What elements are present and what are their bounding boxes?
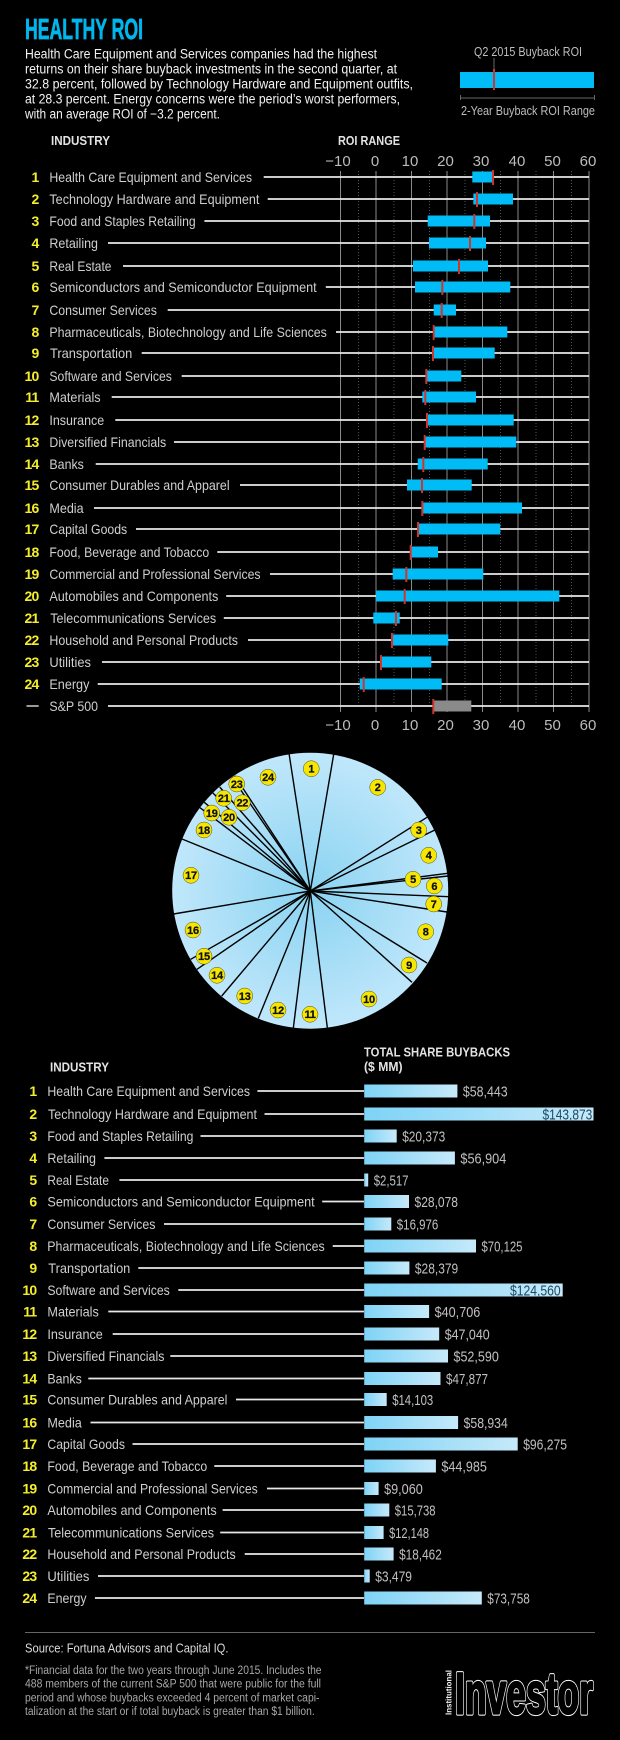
row 24: Energy (47, 1590, 87, 1606)
row 12 (25, 412, 589, 428)
slice number badges: 24 (262, 772, 275, 784)
row 21: 21 (25, 610, 40, 626)
row 3 (32, 213, 589, 229)
row 15: Consumer Durables and Apparel (47, 1392, 227, 1408)
axis grid (340, 171, 589, 712)
row 19: Commercial and Professional Services (49, 566, 261, 582)
bottom axis labels: 60 (580, 717, 596, 734)
row 23: Utilities (47, 1568, 89, 1584)
footnote: *Financial data for the two years through June 2015. Includes the (25, 1665, 322, 1677)
slice number badges: 6 (431, 881, 437, 893)
row 21 (22, 1524, 429, 1542)
slice number badges: 9 (406, 960, 412, 972)
row 16 (25, 500, 589, 516)
row 2 (29, 1106, 593, 1124)
logo: Institutional Investor: Institutional (444, 1670, 454, 1715)
row 16 (22, 1414, 508, 1432)
slice number badges: 22 (236, 798, 248, 810)
row 20: Automobiles and Components (49, 588, 218, 604)
row 2: Technology Hardware and Equipment (48, 1106, 257, 1122)
slice number badges: 15 (198, 951, 210, 963)
slice number badges: 1 (308, 764, 314, 776)
row 3: 3 (32, 213, 40, 229)
row 3: $20,373 (402, 1128, 445, 1146)
row 11: 11 (25, 389, 40, 405)
bottom axis labels: 20 (437, 717, 454, 734)
bottom axis labels (325, 717, 596, 734)
row 13 (22, 1348, 499, 1366)
row 5: Real Estate (47, 1172, 109, 1188)
row 20: Automobiles and Components (47, 1502, 217, 1518)
row 20: 20 (22, 1502, 37, 1518)
slice number badges: 18 (198, 825, 210, 837)
row 13: Diversified Financials (49, 434, 166, 450)
row 17: 17 (25, 521, 40, 537)
row 17: Capital Goods (49, 521, 127, 537)
row 7: 7 (32, 302, 40, 318)
row 12: $47,040 (445, 1326, 490, 1344)
top axis labels: −10 (325, 153, 351, 170)
bottom axis labels: 10 (402, 717, 418, 734)
row 6 (32, 279, 589, 295)
row 24: Energy (49, 676, 89, 692)
row 2: 2 (29, 1106, 37, 1122)
slice number badges: 16 (187, 925, 199, 937)
footnote (25, 1665, 322, 1718)
bottom axis labels: 30 (473, 717, 489, 734)
row 2: $143,873 (542, 1106, 592, 1124)
footnote: period and whose buybacks exceeded 4 percent of market capi- (25, 1693, 320, 1705)
row 18: Food, Beverage and Tobacco (49, 544, 209, 560)
row 18: 18 (22, 1458, 37, 1474)
row 15: $14,103 (392, 1392, 433, 1409)
row 11: Materials (47, 1304, 99, 1320)
row 19: Commercial and Professional Services (47, 1480, 258, 1496)
top axis labels: 10 (402, 153, 418, 170)
slice number badges: 13 (239, 991, 251, 1003)
row 6: 6 (32, 279, 40, 295)
row 17: $96,275 (523, 1436, 567, 1454)
row 11: Materials (49, 389, 101, 405)
row 4 (29, 1150, 506, 1168)
row 21 (25, 610, 589, 626)
column heading: industry: INDUSTRY (51, 134, 111, 148)
slice number badges: 2 (375, 782, 381, 794)
row 24 (25, 676, 589, 692)
row 11 (23, 1304, 480, 1321)
row 12: 12 (22, 1326, 37, 1342)
row 8: Pharmaceuticals, Biotechnology and Life Sciences (47, 1238, 325, 1254)
slice number badges (183, 761, 442, 1022)
row 22: 22 (25, 632, 40, 648)
row 4: Retailing (49, 235, 98, 251)
row 16: Media (49, 500, 84, 516)
legend: 2-Year Buyback ROI Range (461, 103, 595, 118)
bottom axis labels: 50 (544, 717, 561, 734)
row 18: Food, Beverage and Tobacco (47, 1458, 207, 1474)
row 20: $15,738 (395, 1502, 436, 1520)
row 2: 2 (32, 191, 40, 207)
row 13 (25, 434, 589, 450)
row 22: $18,462 (399, 1546, 442, 1564)
row 1 (32, 169, 589, 185)
row 17: 17 (22, 1436, 37, 1452)
row 23: Utilities (49, 654, 91, 670)
row 24: $73,758 (487, 1590, 530, 1608)
column heading: total share buybacks (364, 1046, 510, 1074)
row 8: Pharmaceuticals, Biotechnology and Life Sciences (49, 324, 327, 340)
row 19 (22, 1480, 423, 1498)
row 9: 9 (32, 345, 40, 361)
row 23: 23 (22, 1568, 37, 1584)
row 11: $40,706 (435, 1304, 480, 1321)
row 14: Banks (49, 456, 84, 472)
legend (460, 44, 595, 118)
panel: ROI range chart (25, 134, 596, 734)
footnote: 488 members of the current S&P 500 that were public for the full (25, 1679, 321, 1691)
row 15: 15 (22, 1392, 37, 1408)
footnote: talization at the start or if total buyback is greater than $1 billion. (25, 1706, 315, 1718)
row 1: $58,443 (463, 1084, 508, 1100)
pie chart (172, 753, 449, 1029)
row 11 (25, 389, 589, 405)
slice number badges: 14 (211, 970, 224, 982)
row 1 (29, 1083, 508, 1100)
row 9: Transportation (50, 345, 132, 361)
row 19: $9,060 (384, 1481, 423, 1498)
row 24 (22, 1590, 530, 1608)
row 3 (29, 1128, 445, 1146)
row 10 (25, 368, 589, 384)
row 12: 12 (25, 412, 40, 428)
row 21: 21 (22, 1524, 37, 1540)
row: S&P 500: S&P 500 (49, 698, 98, 714)
row 13: Diversified Financials (47, 1348, 164, 1364)
top axis labels: 0 (371, 153, 379, 170)
row 6: 6 (29, 1194, 37, 1210)
slice number badges: 19 (206, 808, 218, 820)
row 12: Insurance (47, 1326, 103, 1342)
row 18: $44,985 (441, 1458, 487, 1476)
row 16: Media (47, 1414, 82, 1430)
slice dividers (174, 753, 449, 1028)
legend: Q2 2015 Buyback ROI (474, 44, 582, 59)
row 13: 13 (22, 1348, 37, 1364)
row 12: Insurance (49, 412, 104, 428)
row 4: Retailing (47, 1150, 96, 1166)
row 23 (22, 1568, 412, 1586)
row 17 (22, 1436, 567, 1454)
row 15 (22, 1392, 433, 1409)
row 5 (29, 1172, 409, 1190)
slice number badges: 17 (185, 870, 197, 882)
row 20: 20 (25, 588, 40, 604)
row 6: Semiconductors and Semiconductor Equipment (47, 1194, 315, 1210)
row 5: Real Estate (49, 258, 112, 274)
row 9 (29, 1260, 458, 1278)
intro text block: at 28.3 percent. Energy concerns were the period’s worst performers, (25, 91, 400, 106)
row 3: Food and Staples Retailing (49, 213, 196, 229)
slice number badges: 21 (218, 793, 230, 805)
top axis labels: 40 (509, 153, 525, 170)
row 21: Telecommunications Services (48, 1524, 214, 1540)
row 21: $12,148 (389, 1525, 429, 1542)
row 20 (22, 1502, 436, 1520)
slice number badges: 7 (431, 899, 437, 911)
row 1: 1 (29, 1083, 37, 1099)
row 19: 19 (22, 1480, 37, 1496)
top axis labels: 60 (580, 153, 596, 170)
row 14: 14 (25, 456, 40, 472)
row 8: $70,125 (482, 1238, 522, 1256)
row 7 (29, 1216, 438, 1234)
row 19: 19 (25, 566, 40, 582)
row 4 (32, 235, 589, 251)
row 23: 23 (25, 654, 40, 670)
row 14: 14 (22, 1370, 37, 1386)
row 1: Health Care Equipment and Services (47, 1083, 250, 1099)
row 23 (25, 654, 589, 670)
row 9: $28,379 (415, 1260, 458, 1278)
row 17 (25, 521, 589, 537)
column heading: industry: INDUSTRY (50, 1061, 110, 1075)
row 14: Banks (47, 1370, 82, 1386)
row 14: $47,877 (446, 1371, 488, 1388)
intro text block: returns on their share buyback investments in the second quarter, at (25, 61, 397, 76)
row 13: 13 (25, 434, 40, 450)
row 6 (29, 1194, 458, 1211)
row 21: Telecommunications Services (50, 610, 216, 626)
row 1: 1 (32, 169, 40, 185)
row 16: $58,934 (464, 1415, 508, 1432)
row 15: Consumer Durables and Apparel (49, 477, 230, 493)
row 14 (25, 456, 589, 472)
row 22 (22, 1546, 442, 1564)
row 12 (22, 1326, 490, 1344)
row 13: $52,590 (454, 1348, 499, 1366)
row 17: Capital Goods (47, 1436, 125, 1452)
intro text block: with an average ROI of −3.2 percent. (24, 106, 220, 121)
row 5 (32, 258, 589, 274)
bottom axis labels: 0 (371, 717, 379, 734)
row 7: $16,976 (397, 1216, 438, 1234)
row 5: 5 (32, 258, 40, 274)
row 8: 8 (32, 324, 40, 340)
column heading: total share buybacks: ($ MM) (364, 1060, 402, 1074)
top axis labels: 30 (473, 153, 489, 170)
row 10: $124,560 (510, 1282, 561, 1300)
top axis labels: 20 (437, 153, 454, 170)
row 18 (25, 544, 589, 560)
row 22: 22 (22, 1546, 37, 1562)
intro text block (24, 46, 413, 121)
slice number badges: 11 (304, 1009, 316, 1021)
row 16: 16 (25, 500, 40, 516)
slice number badges: 5 (410, 874, 416, 886)
row 7: Consumer Services (49, 302, 157, 318)
row 3: 3 (29, 1128, 37, 1144)
intro text block: 32.8 percent, followed by Technology Hardware and Equipment outfits, (25, 76, 413, 91)
row 16: 16 (22, 1414, 37, 1430)
row 18 (22, 1458, 487, 1476)
row 5: $2,517 (374, 1172, 408, 1190)
row 10: 10 (22, 1282, 37, 1298)
slice number badges: 20 (223, 812, 235, 824)
row 10: 10 (25, 368, 40, 384)
intro text block: Health Care Equipment and Services companies had the highest (25, 46, 377, 61)
row 7: 7 (29, 1216, 37, 1232)
bottom axis labels: 40 (509, 717, 525, 734)
row 15 (25, 477, 589, 493)
row 24: 24 (22, 1590, 37, 1606)
row 10 (22, 1282, 563, 1300)
row 7: Consumer Services (47, 1216, 155, 1232)
title: HEALTHY ROI (25, 14, 143, 46)
row 1: Health Care Equipment and Services (49, 169, 252, 185)
row 20 (25, 588, 589, 604)
row 22: Household and Personal Products (47, 1546, 236, 1562)
row 22 (25, 632, 589, 648)
row 19 (25, 566, 589, 582)
row 23: $3,479 (375, 1568, 412, 1586)
slice number badges: 10 (363, 994, 375, 1006)
row 9: Transportation (48, 1260, 130, 1276)
row 9: 9 (29, 1260, 37, 1276)
row: S&P 500 (26, 698, 589, 714)
row 9 (32, 345, 589, 361)
top axis labels: 50 (544, 153, 561, 170)
top axis labels (325, 153, 596, 170)
row 2 (32, 191, 589, 207)
slice number badges: 12 (272, 1005, 284, 1017)
row 4: $56,904 (460, 1150, 506, 1168)
row 6: Semiconductors and Semiconductor Equipment (49, 279, 317, 295)
slice number badges: 8 (423, 927, 429, 939)
row 8: 8 (29, 1238, 37, 1254)
row 22: Household and Personal Products (49, 632, 238, 648)
row 4: 4 (32, 235, 40, 251)
bottom axis labels: −10 (325, 717, 351, 734)
row 6: $28,078 (414, 1194, 458, 1211)
row 10: Software and Services (47, 1282, 170, 1298)
row 11: 11 (23, 1304, 37, 1320)
row 24: 24 (25, 676, 40, 692)
row 4: 4 (29, 1150, 37, 1166)
row 2: Technology Hardware and Equipment (49, 191, 259, 207)
column heading: ROI range: ROI RANGE (338, 134, 400, 148)
row 14 (22, 1370, 488, 1388)
row 18: 18 (25, 544, 40, 560)
slice number badges: 4 (426, 850, 433, 862)
row 3: Food and Staples Retailing (47, 1128, 193, 1144)
panel: total share buybacks chart (22, 1046, 593, 1608)
slice number badges: 23 (231, 779, 243, 791)
row 10: Software and Services (49, 368, 172, 384)
row 5: 5 (29, 1172, 37, 1188)
source line: Source: Fortuna Advisors and Capital IQ. (25, 1642, 228, 1656)
column heading: total share buybacks: TOTAL SHARE BUYBACKS (364, 1046, 510, 1060)
slice number badges: 3 (416, 825, 422, 837)
row 7 (32, 302, 589, 318)
row 15: 15 (25, 477, 40, 493)
row 8 (32, 324, 589, 340)
row 8 (29, 1238, 523, 1256)
